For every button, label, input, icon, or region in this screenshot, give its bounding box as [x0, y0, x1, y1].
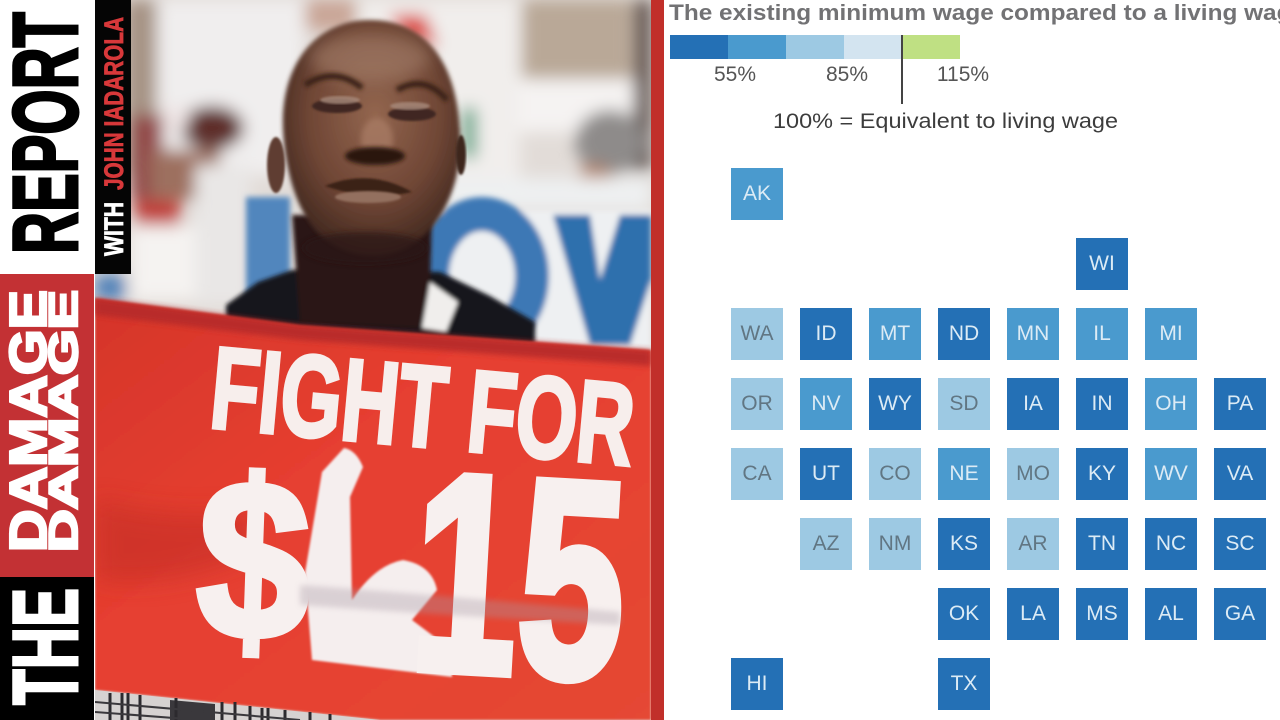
tile grid map of US states: IN	[1092, 392, 1112, 415]
tile grid map of US states: IA	[1023, 392, 1043, 415]
logo tagline: WITH JOHN IADAROLA	[99, 17, 129, 256]
tile grid map of US states: OK	[949, 602, 979, 625]
tile grid map of US states: HI	[746, 672, 768, 695]
tile grid map of US states: AL	[1158, 602, 1184, 625]
tile grid map of US states: MN	[1017, 322, 1049, 345]
tile grid map of US states: MO	[1016, 462, 1050, 485]
tile grid map of US states: MT	[880, 322, 910, 345]
tile grid map of US states: SD	[949, 392, 979, 415]
tile grid map of US states: CO	[879, 462, 911, 485]
tile grid map of US states: CA	[742, 462, 772, 485]
panel: living wage chart	[664, 0, 1280, 720]
tile grid map of US states: KS	[950, 532, 978, 555]
logo word: DAMAGE upper: DAMAGE	[0, 290, 58, 552]
legend: 115%	[937, 63, 989, 86]
tile grid map of US states: WI	[1089, 252, 1115, 275]
figure: man's head	[267, 20, 466, 264]
tile grid map of US states: ID	[816, 322, 836, 345]
logo tagline: WITH JOHN IADAROLA: WITH	[99, 202, 129, 256]
tile grid map of US states: AK	[743, 182, 771, 205]
blurred blue lettering on background sign	[246, 197, 651, 350]
tile grid map of US states: UT	[812, 462, 840, 485]
legend: 85%	[826, 63, 868, 86]
tile grid map of US states: MS	[1086, 602, 1118, 625]
tile grid map of US states: TN	[1088, 532, 1116, 555]
figure: man's neck and hoodie	[226, 215, 535, 345]
tile grid map of US states: NV	[811, 392, 841, 415]
tile grid map of US states: TX	[951, 672, 977, 695]
red divider between photo and chart	[651, 0, 664, 720]
legend	[670, 35, 1118, 133]
tile grid map of US states: KY	[1088, 462, 1116, 485]
tile grid map of US states	[731, 168, 1266, 710]
tile grid map of US states: PA	[1227, 392, 1253, 415]
tile grid map of US states: NM	[879, 532, 911, 555]
tile grid map of US states: WA	[740, 322, 774, 345]
tile grid map of US states: GA	[1225, 602, 1255, 625]
tile grid map of US states: LA	[1020, 602, 1046, 625]
panel: protest photo	[95, 0, 651, 720]
branding column: The Damage Report	[0, 0, 131, 720]
tile grid map of US states: NC	[1156, 532, 1186, 555]
tile grid map of US states: WY	[878, 392, 912, 415]
tile grid map of US states: ND	[949, 322, 979, 345]
legend: 55%	[714, 63, 756, 86]
tile grid map of US states: MI	[1159, 322, 1183, 345]
plaid shirt at bottom of photo	[95, 690, 380, 720]
icon: raised fist	[305, 448, 452, 677]
legend: 100% = Equivalent to living wage	[773, 109, 1118, 133]
tile grid map of US states: WV	[1154, 462, 1188, 485]
tile grid map of US states: VA	[1227, 462, 1253, 485]
banner text: dollar sign: $	[193, 432, 314, 688]
tile grid map of US states: SC	[1225, 532, 1255, 555]
tile grid map of US states: NE	[949, 462, 979, 485]
red banner	[95, 298, 651, 720]
tile grid map of US states: AR	[1018, 532, 1048, 555]
tile grid map of US states: OH	[1155, 392, 1187, 415]
logo word: DAMAGE lower: DAMAGE	[42, 290, 86, 552]
tile grid map of US states: AZ	[813, 532, 840, 555]
chart title: The existing minimum wage compared to a living wage	[669, 0, 1280, 25]
tile grid map of US states: IL	[1093, 322, 1111, 345]
tile grid map of US states: OR	[741, 392, 773, 415]
banner text: FIGHT FOR: FIGHT FOR	[206, 322, 640, 490]
blurred crowd and signs background	[95, 0, 651, 305]
